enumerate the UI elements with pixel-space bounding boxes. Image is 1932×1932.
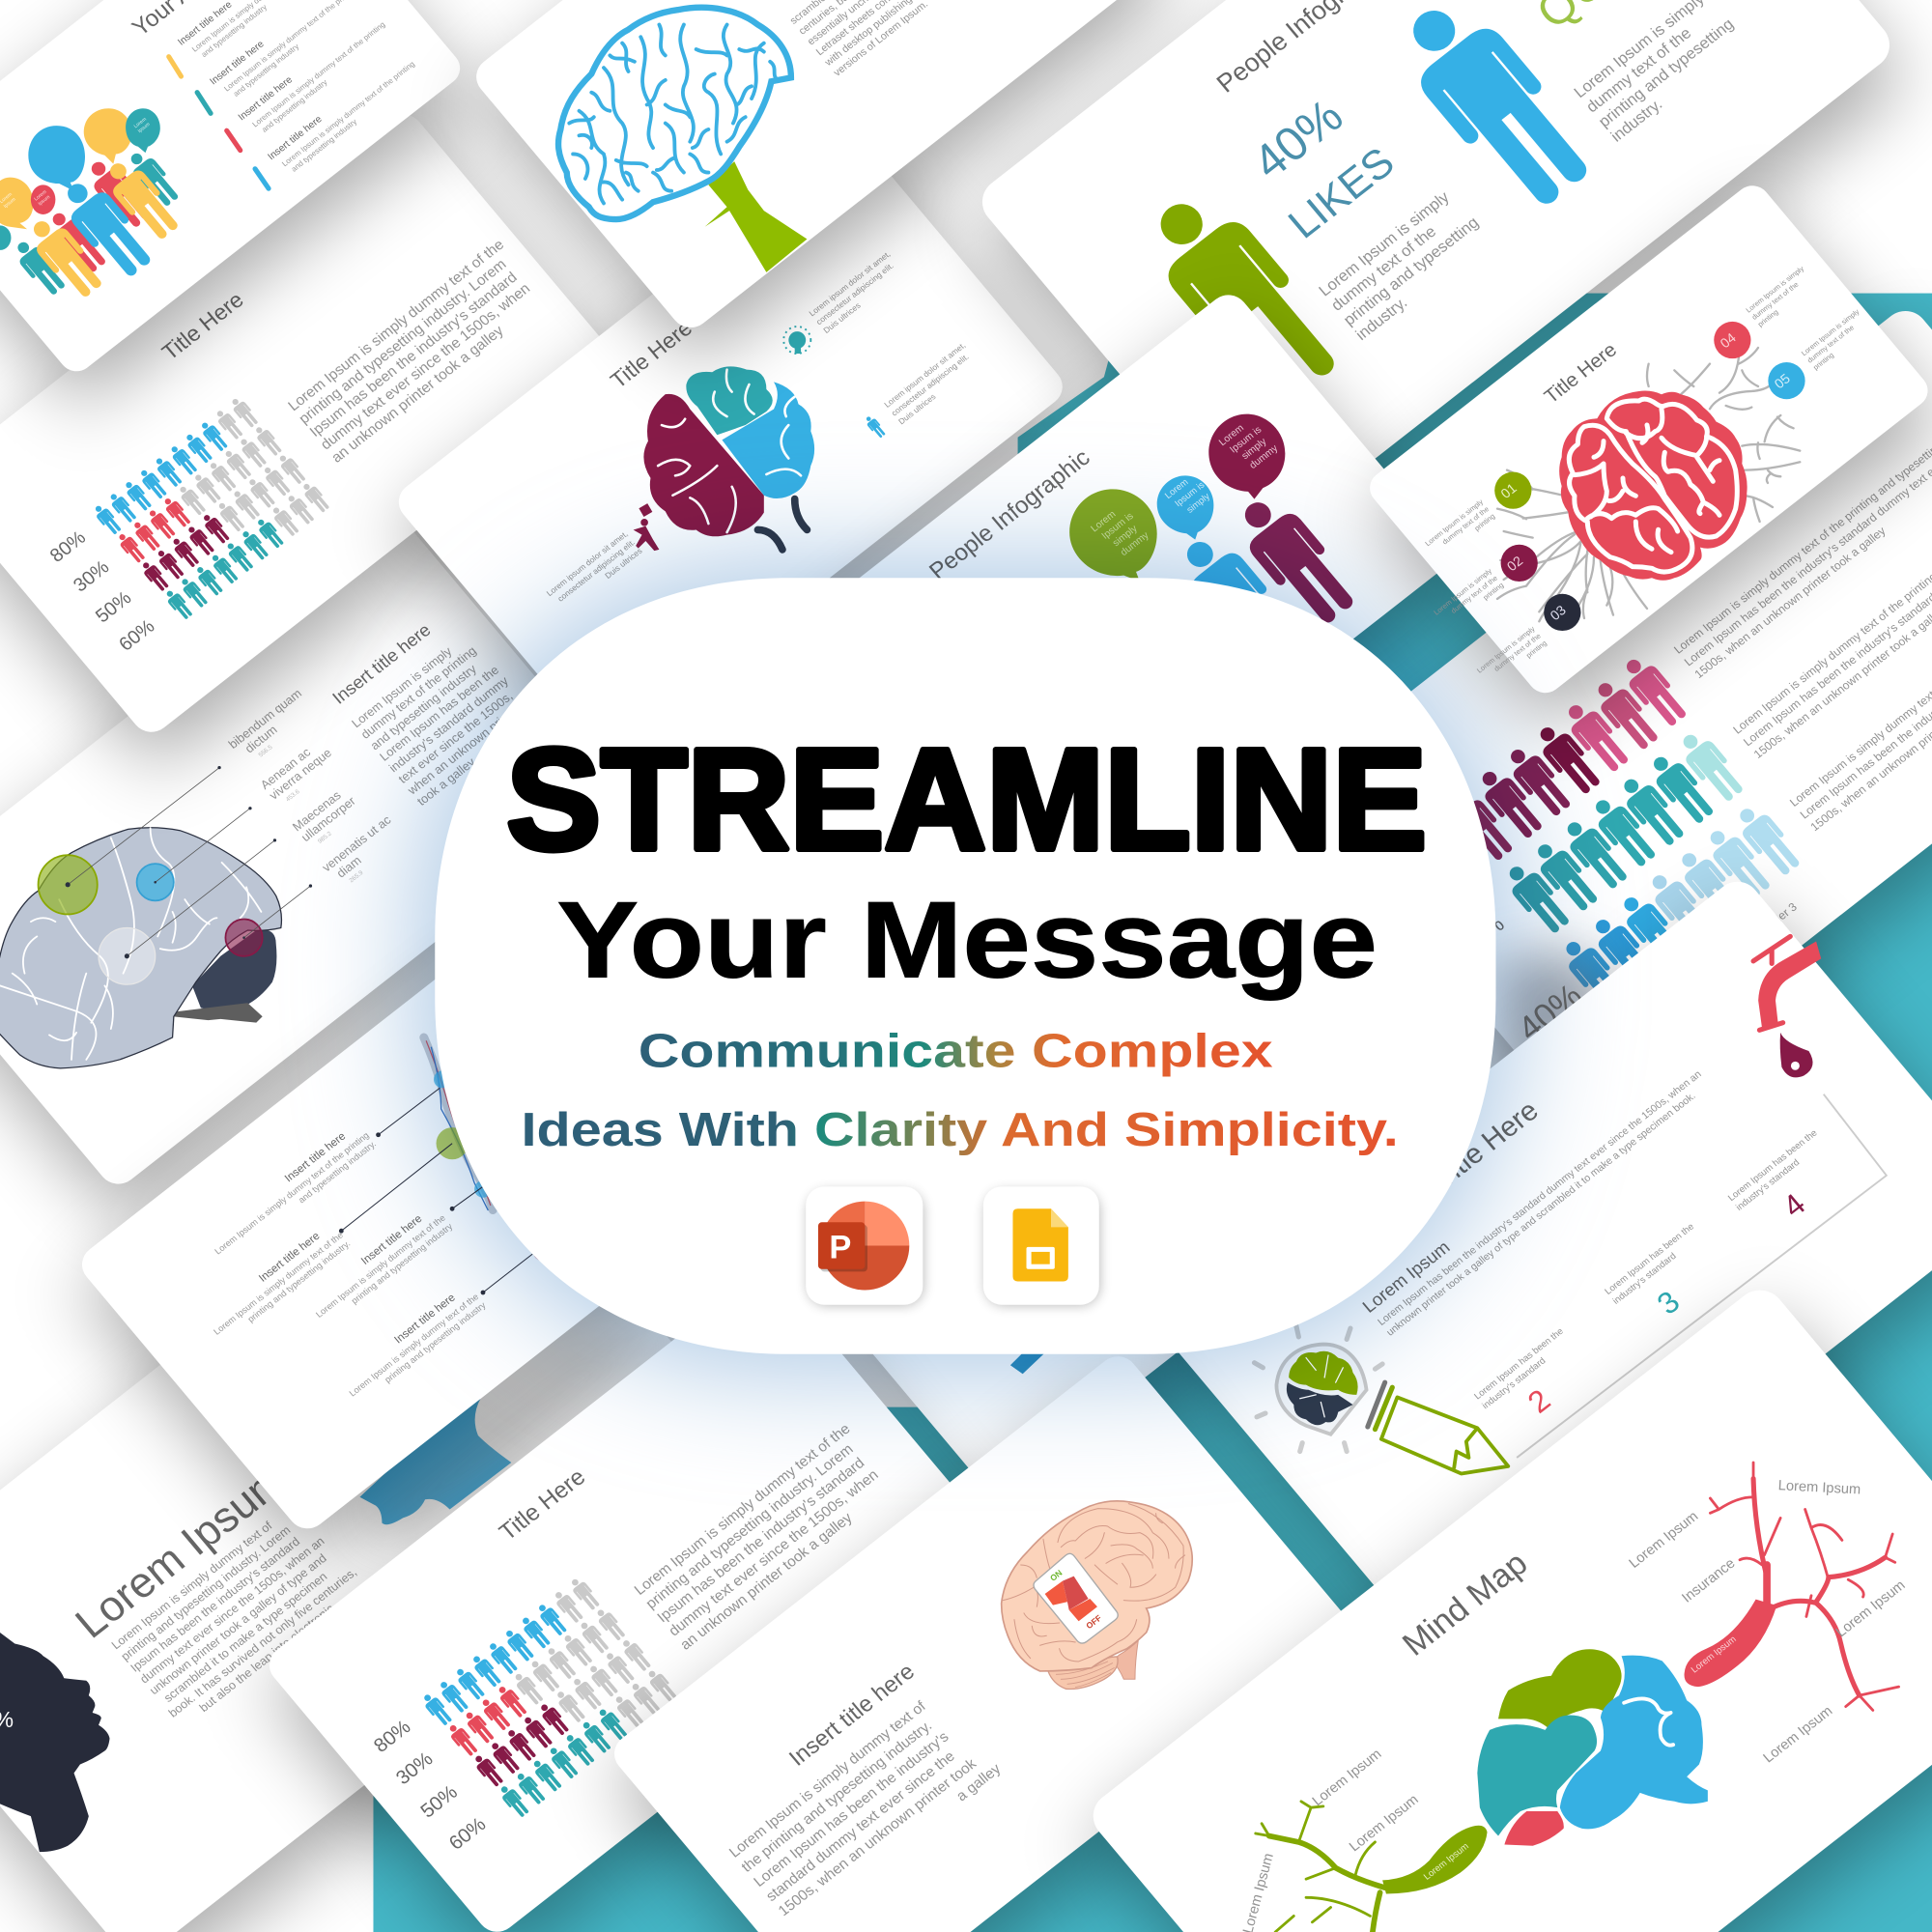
slide: people percentage chart top	[0, 106, 633, 769]
text block: printing and typesetting industry. Lorem	[643, 1441, 857, 1612]
slide: maroon teal blue brain	[390, 134, 1078, 783]
callout 2: Insert title here	[257, 1231, 323, 1285]
step 3: 3	[1650, 1284, 1687, 1321]
callout 1: Insert title here	[283, 1130, 348, 1184]
people row 2	[1499, 726, 1748, 938]
label: Maecenas: ullamcorper	[298, 793, 358, 844]
bubble: maroon	[1208, 414, 1285, 499]
label on green branch: Lorem Ipsum	[1422, 1841, 1471, 1883]
marker: blue circle	[137, 864, 174, 900]
text block: lorem: Lorem Ipsum is simply dummy text of the	[285, 237, 507, 414]
central panel	[435, 578, 1495, 1354]
text block: standard dummy text ever since the	[763, 1748, 958, 1905]
label: venenatis: diam	[333, 853, 364, 880]
text: note 3: Duis ultrices	[603, 546, 644, 581]
labels right: Lorem Ipsum is simply	[1744, 264, 1805, 315]
markers	[434, 1070, 557, 1262]
text block: lorem: dummy text ever since the 1500s, when	[318, 280, 533, 453]
people row 3	[1556, 800, 1805, 1013]
label: Maecenas: 985.2	[317, 830, 333, 845]
list item 2: and typesetting industry	[232, 43, 300, 99]
stat: likes: LIKES	[1280, 139, 1404, 247]
labels left	[1423, 497, 1548, 689]
branch labels: Lorem Ipsum	[1777, 1478, 1861, 1498]
heading: title here: Title Here	[157, 287, 248, 365]
icon: four colour brain	[1477, 1649, 1708, 1846]
text: note 3: consectetur adipiscing elit.	[555, 537, 637, 604]
bubble: blue: Lorem	[1163, 477, 1190, 501]
text block: 1500s, when an unknown printer took	[776, 1755, 980, 1919]
icon: green branches	[1256, 1802, 1488, 1932]
labels left: printing	[1472, 512, 1496, 533]
icon: blue outline brain	[558, 8, 791, 219]
heading: Lorem Ipsum: Lorem Ipsum	[67, 1456, 296, 1647]
label: bibendum quam: 556.5	[258, 744, 274, 758]
icon: blue person	[1169, 526, 1307, 671]
icon: red branches	[1685, 1463, 1899, 1710]
text block: an unknown printer took a galley	[677, 1510, 856, 1654]
badge: 04	[1714, 322, 1750, 358]
bubble: green: Lorem	[1090, 509, 1118, 534]
slide: brain switch	[607, 1349, 1364, 1932]
subtitle line 1: Communicate Complex	[639, 1026, 1273, 1078]
icon: pink brain with switch: ON	[1048, 1568, 1064, 1583]
list item 3: and typesetting industry	[260, 78, 329, 134]
shading in gap between slides	[357, 1324, 690, 1540]
icon: cerebellum	[192, 929, 276, 1010]
slide: face silhouette and lorem ipsum	[0, 1115, 781, 1932]
text block: lorem: unknown printer took a galley of type and	[147, 1551, 329, 1697]
icon: small person	[864, 414, 887, 440]
label: header 3: Header 3	[1753, 899, 1800, 940]
slide: your audience	[0, 0, 474, 408]
text block: left: dummy text of the	[1327, 222, 1439, 315]
list bars	[169, 57, 269, 188]
list item 3: Lorem Ipsum is simply dummy text of the printing	[251, 20, 386, 128]
callout 2: Lorem Ipsum is simply dummy text of the	[212, 1230, 345, 1337]
cerebrum	[1002, 1501, 1192, 1671]
slide: blue outline brain	[469, 0, 1173, 365]
callout 4: Insert title here	[392, 1292, 458, 1346]
slide: people percentage chart bottom	[261, 1266, 1009, 1932]
branch labels: Lorem Ipsum	[1627, 1509, 1701, 1572]
percent labels: 50%	[92, 587, 135, 627]
bubble: blue: simply	[1184, 491, 1212, 516]
percent labels: 80%	[46, 527, 90, 567]
text: lorem fragment: versions of Lorem Ipsum.	[832, 0, 930, 79]
chart: people grid	[91, 395, 331, 621]
text block: insert title: Lorem Ipsum has been the	[377, 663, 501, 764]
branch labels: Lorem Ipsum	[1761, 1703, 1835, 1766]
step 4: industry's standard	[1734, 1157, 1802, 1213]
bubble: maroon: Ipsum is	[1228, 425, 1264, 455]
heading: title here: Title Here	[606, 315, 696, 393]
bubble captions	[0, 117, 152, 210]
icon: blue person	[1383, 0, 1605, 219]
callout 1: and typesetting industry.	[297, 1139, 378, 1205]
callout 4: printing and typesetting industry	[383, 1300, 488, 1384]
text: note 1: Lorem ipsum dolor sit amet,	[807, 249, 893, 318]
badge: 03	[1544, 594, 1580, 631]
icon: brain stem	[173, 1003, 263, 1023]
text block: a galley	[953, 1760, 1005, 1804]
icon: gray brain	[0, 828, 281, 1068]
bubble: blue: Ipsum is	[1173, 480, 1208, 509]
icon: nerve strand	[424, 1037, 493, 1210]
bubble captions: Lorem	[33, 189, 48, 202]
label: Aenean ac: 453.6	[285, 788, 301, 803]
people group	[10, 147, 185, 302]
icon: dark face silhouette	[0, 1633, 110, 1852]
bubble captions: Lorem	[133, 117, 148, 129]
partial percent: 30%	[1458, 911, 1509, 957]
percent labels: 60%	[115, 615, 158, 656]
label: bibendum quam: bibendum quam	[225, 686, 304, 752]
label: venenatis: venenatis ut ac	[319, 812, 394, 874]
stat: 40%: 40%	[1511, 977, 1590, 1048]
chart: people grid	[419, 1576, 679, 1819]
percent labels: 30%	[392, 1748, 437, 1789]
text block: the printing and typesetting industry.	[739, 1718, 935, 1876]
list item 2: Insert title here	[209, 39, 267, 87]
text block: dummy text ever since the 1500s, when	[666, 1466, 882, 1639]
teal backdrop panel	[373, 294, 1932, 1932]
text block: lorem: scrambled it to make a type specimen	[161, 1570, 329, 1705]
brain stem	[1113, 1640, 1138, 1679]
icon: bulb	[783, 327, 810, 354]
heading: mind map: Mind Map	[1396, 1545, 1535, 1663]
text block: unknown printer took a galley of type and scrambled it to make a type specimen book.	[1384, 1091, 1698, 1338]
slide: faucet steps and bulb pencil	[1158, 873, 1932, 1689]
text block: right: industry.	[1607, 95, 1665, 146]
list item 1: Insert title here	[176, 0, 235, 47]
step 2: Lorem Ipsum has been the	[1472, 1326, 1566, 1402]
marker: maroon circle	[225, 920, 263, 956]
labels right: printing	[1756, 307, 1780, 328]
text block: insert title: dummy text of the printing	[358, 643, 479, 742]
badge: 01	[1494, 472, 1531, 509]
label: Aenean ac: viverra neque	[267, 746, 334, 803]
branch labels: Lorem Ipsum	[1833, 1577, 1909, 1640]
text block: lorem: printing and typesetting industry. Lorem	[296, 256, 510, 427]
callout 4: Lorem Ipsum is simply dummy text of the	[348, 1292, 480, 1399]
badge: 04: 04	[1717, 329, 1739, 351]
slide: gray lateral brain	[0, 508, 638, 1221]
icon: pink brain with switch: OFF	[1084, 1613, 1103, 1631]
labels left: Lorem Ipsum is simply	[1475, 624, 1537, 675]
text block: lorem: Lorem Ipsum is simply dummy text of	[109, 1519, 275, 1652]
bubble: green: simply	[1111, 523, 1140, 549]
slide: nerve callouts	[74, 869, 813, 1566]
title: STREAMLINE: STREAMLINE	[506, 719, 1427, 880]
list item 4: Lorem Ipsum is simply dummy text of the printing	[280, 60, 416, 168]
text block: insert title: and typesetting industry	[367, 661, 479, 753]
badge: 02: 02	[1504, 553, 1525, 574]
callout 3: Insert title here	[359, 1213, 424, 1267]
labels left: Lorem Ipsum is simply	[1432, 566, 1493, 617]
bubble captions: Ipsum	[38, 194, 51, 207]
shading near centre panel	[1497, 949, 1602, 1084]
callout 1: Lorem Ipsum is simply dummy text of the printing	[213, 1130, 371, 1257]
callout 3: Lorem Ipsum is simply dummy text of the	[314, 1213, 447, 1320]
list item 4: and typesetting industry	[290, 117, 358, 174]
subheading: lorem ipsum: Lorem Ipsum	[1358, 1236, 1454, 1317]
heading: title here: Title Here	[495, 1463, 590, 1546]
hidden slide backing	[371, 290, 1127, 1407]
leader lines	[339, 1088, 538, 1294]
callout 2: printing and typesetting industry.	[245, 1238, 352, 1324]
heading: title here: Title Here	[1541, 339, 1621, 408]
text block 1: 1500s, when an unknown printer took a galley	[1691, 524, 1889, 681]
text: note 2: Lorem ipsum dolor sit amet,	[882, 340, 967, 410]
bubble: maroon: Lorem	[1217, 423, 1246, 448]
heading: people infographic: People Infographic	[924, 444, 1095, 584]
callout 3: printing and typesetting industry	[350, 1221, 455, 1306]
text: note 1: Duis ultrices	[821, 300, 863, 335]
branch labels: Lorem Ipsum	[1310, 1747, 1384, 1809]
slide: red brain with roots	[1363, 179, 1932, 729]
slide: pink teal blue people	[1292, 302, 1932, 1152]
folds	[1003, 1504, 1185, 1662]
text block: left: industry.	[1352, 294, 1410, 344]
step 3: Lorem Ipsum has been the	[1603, 1221, 1696, 1297]
labels right: dummy text of the	[1750, 280, 1801, 322]
icon: pencil	[1381, 1397, 1508, 1474]
labels right: dummy text of the	[1805, 323, 1856, 364]
gray roots	[1497, 348, 1800, 621]
badge: 02	[1501, 545, 1538, 582]
branch labels: Insurance	[1679, 1556, 1738, 1606]
switch plate	[1034, 1553, 1118, 1643]
icon card: Google Slides	[983, 1186, 1099, 1305]
branch labels: Lorem Ipsum	[1347, 1792, 1422, 1855]
icon: man with box	[634, 503, 659, 551]
heading: insert title here: Insert title here	[784, 1660, 920, 1772]
leader lines	[68, 768, 310, 956]
text: note 1: consectetur adipiscing elit.	[814, 261, 895, 327]
bubble: blue	[1157, 470, 1215, 540]
slide: people likes	[972, 0, 1907, 578]
text block: insert title: took a galley	[414, 754, 478, 809]
text block: lorem: printing and typesetting industry. Lorem	[119, 1523, 293, 1663]
heading: title here: Title Here	[1428, 1094, 1545, 1194]
text block: lorem: Ipsum has been the industry's standard	[128, 1535, 302, 1675]
text block: lorem: an unknown printer took a galley	[328, 323, 507, 467]
icon: segmented brain	[643, 366, 814, 550]
labels left: printing	[1524, 639, 1548, 660]
step 2: industry's standard	[1480, 1355, 1548, 1411]
step 3: industry's standard	[1611, 1251, 1679, 1307]
labels left: dummy text of the	[1440, 504, 1491, 546]
text block: lorem: Ipsum has been the industry's standard	[307, 270, 521, 440]
text block: Lorem Ipsum is simply dummy text of	[726, 1698, 929, 1861]
labels right	[1744, 264, 1873, 372]
text block: lorem: book. It has survived not only five centuries,	[166, 1565, 359, 1720]
step 4: 4	[1776, 1186, 1812, 1224]
percent labels: 50%	[417, 1781, 462, 1822]
cerebellum	[1048, 1657, 1118, 1690]
list item 1: and typesetting industry	[200, 3, 269, 59]
branch labels	[1240, 1478, 1909, 1932]
text block: right: dummy text of the	[1582, 24, 1694, 116]
bubble captions: Ipsum	[3, 197, 17, 210]
text block: insert title: text ever since the 1500s,	[395, 689, 515, 786]
icon: blue face silhouette	[359, 1399, 511, 1524]
percent labels: 80%	[370, 1717, 415, 1757]
icon: maroon person	[1227, 487, 1365, 633]
icon: red brain with roots	[1497, 348, 1800, 621]
label: Maecenas: Maecenas	[290, 788, 344, 834]
bubble: maroon: dummy	[1248, 442, 1281, 471]
labels left: dummy text of the	[1492, 632, 1543, 673]
text block: Lorem Ipsum has been the industry's standard dummy text ever since the 1500s, when an	[1376, 1068, 1704, 1328]
people row 1	[1443, 651, 1692, 866]
slide: hidden gray slide with blue foot	[799, 810, 1582, 1525]
bubble: green: Ipsum is	[1100, 511, 1136, 542]
label: venenatis: 265.9	[348, 869, 365, 884]
text: note 2: consectetur adipiscing elit.	[890, 352, 971, 418]
bubble: green: dummy	[1119, 529, 1151, 558]
icon: pink brain with switch	[1002, 1501, 1192, 1690]
subtitle line 2: Ideas With Clarity And Simplicity.	[522, 1104, 1399, 1156]
marker: white circle	[99, 927, 156, 984]
list item 3: Insert title here	[237, 74, 295, 123]
speech bubbles	[0, 108, 160, 250]
blue glow around central panel	[435, 578, 1495, 1354]
badge: 01: 01	[1497, 480, 1520, 501]
labels right: printing	[1811, 351, 1835, 372]
badge: 05: 05	[1771, 370, 1793, 391]
slide: people speech bubbles	[738, 287, 1465, 972]
label on red branch: Lorem Ipsum	[1690, 1634, 1739, 1675]
icon: bulb brain	[1254, 1325, 1392, 1452]
badge: 05	[1768, 362, 1805, 399]
list item 4: Insert title here	[266, 114, 325, 162]
labels left: Lorem Ipsum is simply	[1423, 497, 1485, 548]
label: Aenean ac: Aenean ac	[258, 744, 314, 792]
heading: insert title here: Insert title here	[328, 619, 435, 708]
text block: lorem: but also the leap into electronic	[197, 1602, 337, 1715]
icon: faucet	[1753, 936, 1821, 1077]
slide: mind map	[1083, 1280, 1932, 1932]
text block: right: printing and typesetting	[1595, 14, 1737, 130]
frame line	[1517, 1094, 1887, 1458]
text: note 3: Lorem ipsum dolor sit amet,	[545, 528, 630, 598]
percent labels: 60%	[445, 1814, 490, 1855]
bubble captions: Ipsum	[137, 122, 152, 134]
text block: insert title: when an unknown printer	[404, 701, 523, 798]
label: bibendum quam: dictum	[242, 723, 280, 755]
icon card: PowerPoint: P	[829, 1229, 851, 1265]
text block: left: printing and typesetting	[1340, 213, 1482, 329]
text block: Lorem Ipsum has been the industry's	[751, 1728, 952, 1890]
text block: insert title: Lorem Ipsum is simply	[349, 643, 455, 730]
percent labels	[370, 1717, 490, 1855]
icon: green brain stem	[705, 161, 807, 272]
marker: green circle	[39, 855, 98, 914]
bubble: maroon: simply	[1240, 436, 1269, 462]
text block: lorem: dummy text ever since the 1500s, when an	[137, 1534, 327, 1686]
icon: green person	[1131, 179, 1353, 413]
leader dots	[66, 766, 312, 958]
percent labels	[46, 527, 158, 656]
labels right: Lorem Ipsum is simply	[1800, 307, 1861, 357]
brain folds	[0, 828, 261, 1060]
percent labels: 30%	[70, 556, 113, 596]
labels left: dummy text of the	[1449, 574, 1499, 615]
step 2: 2	[1520, 1382, 1557, 1420]
bubble: green	[1069, 489, 1157, 582]
text: note 2: Duis ultrices	[896, 391, 937, 426]
badge: 03: 03	[1547, 602, 1569, 623]
text block: Lorem Ipsum is simply dummy text of the	[632, 1421, 854, 1599]
title: Your Message: Your Message	[557, 878, 1378, 1000]
labels left: printing	[1481, 581, 1505, 602]
text block: Ipsum has been the industry's standard	[654, 1455, 867, 1626]
text block: left: Lorem Ipsum is simply	[1316, 187, 1453, 299]
step 4: Lorem Ipsum has been the	[1726, 1128, 1820, 1204]
text block: insert title: industry's standard dummy	[386, 673, 511, 775]
stat: 40%: 40%	[1242, 89, 1353, 189]
icon card: PowerPoint	[806, 1186, 923, 1305]
toggle	[1045, 1581, 1067, 1605]
